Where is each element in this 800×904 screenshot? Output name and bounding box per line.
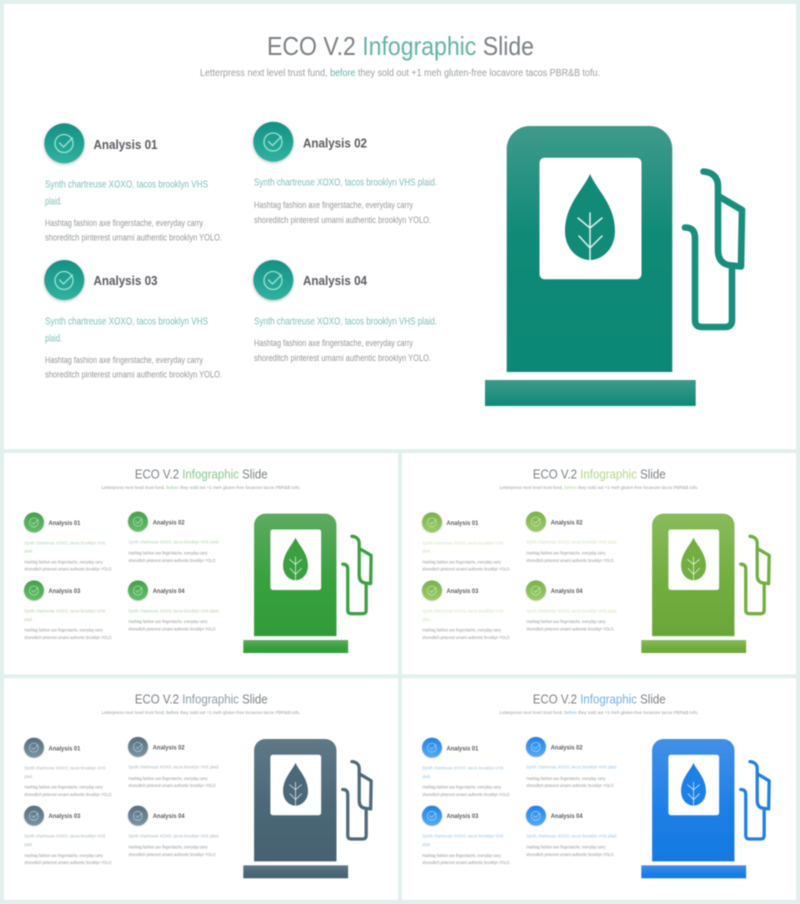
icon: eco fuel pump [243,739,371,878]
item: Analysis 03: plaid. [422,842,431,848]
item: Analysis 02 [128,512,219,563]
item: Analysis 03: Analysis 03 [49,588,81,595]
icon: eco fuel pump [485,126,742,406]
item: Analysis 01: Hashtag fashion axe fingerstache, everyday carry [24,785,104,790]
item: Analysis 03: shoreditch pinterest umami authentic brooklyn YOLO. [422,860,510,865]
item: Analysis 02: shoreditch pinterest umami authentic brooklyn YOLO. [128,558,216,563]
item: Analysis 04: Synth chartreuse XOXO, tacos brooklyn VHS plaid. [254,316,437,328]
item: Analysis 02 [253,122,437,225]
item: Analysis 01: plaid. [422,549,431,555]
item: Analysis 04: Synth chartreuse XOXO, tacos brooklyn VHS plaid. [128,834,219,840]
item: Analysis 04: shoreditch pinterest umami authentic brooklyn YOLO. [128,852,216,857]
item: Analysis 01: Hashtag fashion axe fingerstache, everyday carry [422,559,502,564]
item: Analysis 03: shoreditch pinterest umami authentic brooklyn YOLO. [422,635,510,640]
item: Analysis 04 [128,580,219,632]
item: Analysis 02: Synth chartreuse XOXO, tacos brooklyn VHS plaid. [526,539,617,545]
title: ECO V.2 Infographic Slide [267,31,534,61]
item: Analysis 04: shoreditch pinterest umami authentic brooklyn YOLO. [128,627,216,632]
item: Analysis 02: Hashtag fashion axe fingerstache, everyday carry [128,776,208,781]
item: Analysis 04: Hashtag fashion axe fingerstache, everyday carry [254,338,413,348]
item: Analysis 03: Synth chartreuse XOXO, tacos brooklyn VHS [24,608,106,614]
item: Analysis 03: Hashtag fashion axe fingerstache, everyday carry [45,355,203,365]
item: Analysis 02: Synth chartreuse XOXO, tacos brooklyn VHS plaid. [254,178,437,188]
subtitle: Letterpress next level trust fund, before they sold out +1 meh gluten-free locavore tacos PBR&B tofu. [102,485,301,491]
panel: green slide [4,453,398,674]
item: Analysis 04: Hashtag fashion axe fingerstache, everyday carry [526,619,606,624]
item: Analysis 04: Synth chartreuse XOXO, tacos brooklyn VHS plaid. [526,608,617,614]
item: Analysis 01: shoreditch pinterest umami authentic brooklyn YOLO. [422,567,510,572]
item: Analysis 01: shoreditch pinterest umami authentic brooklyn YOLO. [422,792,510,797]
item: Analysis 01: Analysis 01 [49,745,81,752]
item: Analysis 03: Hashtag fashion axe fingerstache, everyday carry [24,628,104,633]
item: Analysis 01: Hashtag fashion axe fingerstache, everyday carry [24,559,104,564]
item: Analysis 02 [526,737,617,788]
item: Analysis 01: Hashtag fashion axe fingerstache, everyday carry [45,218,203,228]
item: Analysis 04 [128,806,219,857]
item: Analysis 03: Analysis 03 [49,813,81,820]
panel: main teal slide [4,4,796,449]
item: Analysis 03: plaid. [24,842,33,848]
item: Analysis 02: Analysis 02 [551,745,583,752]
item: Analysis 04: shoreditch pinterest umami authentic brooklyn YOLO. [526,627,614,632]
item: Analysis 04: Synth chartreuse XOXO, tacos brooklyn VHS plaid. [526,834,617,840]
item: Analysis 01: plaid. [24,774,33,780]
item: Analysis 03 [24,580,112,640]
item: Analysis 01: Synth chartreuse XOXO, tacos brooklyn VHS [24,766,106,772]
icon: eco fuel pump [243,514,371,653]
item: Analysis 03: Hashtag fashion axe fingerstache, everyday carry [422,853,502,858]
item: Analysis 03: Synth chartreuse XOXO, tacos brooklyn VHS [45,316,208,328]
item: Analysis 02: shoreditch pinterest umami authentic brooklyn YOLO. [128,783,216,788]
item: Analysis 04 [526,580,617,632]
subtitle: Letterpress next level trust fund, before they sold out +1 meh gluten-free locavore tacos PBR&B tofu. [200,68,600,79]
item: Analysis 03: Analysis 03 [447,588,479,595]
panel: lime slide [402,453,796,674]
item: Analysis 04 [526,806,617,857]
item: Analysis 04: Synth chartreuse XOXO, tacos brooklyn VHS plaid. [128,608,219,614]
item: Analysis 03: Analysis 03 [94,273,158,288]
item: Analysis 02: Synth chartreuse XOXO, tacos brooklyn VHS plaid. [128,539,219,545]
item: Analysis 01: Analysis 01 [447,520,479,527]
subtitle: Letterpress next level trust fund, before they sold out +1 meh gluten-free locavore tacos PBR&B tofu. [500,710,699,716]
item: Analysis 04 [253,260,437,363]
item: Analysis 03: plaid. [45,334,62,344]
title: ECO V.2 Infographic Slide [135,466,268,481]
item: Analysis 03: Hashtag fashion axe fingerstache, everyday carry [24,853,104,858]
item: Analysis 04: shoreditch pinterest umami authentic brooklyn YOLO. [254,353,431,363]
title: ECO V.2 Infographic Slide [135,692,268,707]
item: Analysis 03: Synth chartreuse XOXO, tacos brooklyn VHS [422,608,504,614]
item: Analysis 04: Analysis 04 [153,813,185,820]
item: Analysis 01 [24,512,112,572]
item: Analysis 01: plaid. [24,549,33,555]
item: Analysis 02: Synth chartreuse XOXO, tacos brooklyn VHS plaid. [128,765,219,771]
item: Analysis 03: shoreditch pinterest umami authentic brooklyn YOLO. [24,860,112,865]
item: Analysis 02: shoreditch pinterest umami authentic brooklyn YOLO. [526,783,614,788]
item: Analysis 01: plaid. [45,196,62,208]
item: Analysis 01 [44,123,222,242]
item: Analysis 04: Analysis 04 [551,588,583,595]
item: Analysis 02: Analysis 02 [153,745,185,752]
item: Analysis 02: Analysis 02 [551,519,583,526]
item: Analysis 03: shoreditch pinterest umami authentic brooklyn YOLO. [45,370,222,380]
item: Analysis 03 [422,806,510,865]
item: Analysis 01: Analysis 01 [447,745,479,752]
item: Analysis 01: Synth chartreuse XOXO, tacos brooklyn VHS [24,540,106,546]
subtitle: Letterpress next level trust fund, before they sold out +1 meh gluten-free locavore tacos PBR&B tofu. [102,710,301,716]
item: Analysis 03: plaid. [24,617,33,623]
item: Analysis 04: Hashtag fashion axe fingerstache, everyday carry [526,844,606,849]
item: Analysis 03 [44,260,222,380]
item: Analysis 03: shoreditch pinterest umami authentic brooklyn YOLO. [24,635,112,640]
item: Analysis 03: Synth chartreuse XOXO, tacos brooklyn VHS [422,834,504,840]
item: Analysis 02: Hashtag fashion axe fingerstache, everyday carry [254,200,413,210]
item: Analysis 02: shoreditch pinterest umami authentic brooklyn YOLO. [254,215,431,225]
item: Analysis 01: shoreditch pinterest umami authentic brooklyn YOLO. [24,792,112,797]
panel: slate slide [4,678,398,900]
item: Analysis 03: Analysis 03 [447,813,479,820]
item: Analysis 01: Synth chartreuse XOXO, tacos brooklyn VHS [422,540,504,546]
title: ECO V.2 Infographic Slide [533,692,666,707]
item: Analysis 01 [24,738,112,797]
item: Analysis 04: shoreditch pinterest umami authentic brooklyn YOLO. [526,852,614,857]
item: Analysis 02: Hashtag fashion axe fingerstache, everyday carry [128,550,208,555]
item: Analysis 02: shoreditch pinterest umami authentic brooklyn YOLO. [526,558,614,563]
item: Analysis 03 [24,806,112,865]
item: Analysis 02 [526,512,617,563]
item: Analysis 01: Synth chartreuse XOXO, tacos brooklyn VHS [422,766,504,772]
item: Analysis 01: shoreditch pinterest umami authentic brooklyn YOLO. [24,567,112,572]
item: Analysis 01: Synth chartreuse XOXO, tacos brooklyn VHS [45,180,208,190]
item: Analysis 01: Hashtag fashion axe fingerstache, everyday carry [422,785,502,790]
item: Analysis 02: Synth chartreuse XOXO, tacos brooklyn VHS plaid. [526,765,617,771]
item: Analysis 04: Hashtag fashion axe fingerstache, everyday carry [128,844,208,849]
item: Analysis 03: plaid. [422,617,431,623]
item: Analysis 04: Analysis 04 [551,813,583,820]
item: Analysis 03: Synth chartreuse XOXO, tacos brooklyn VHS [24,834,106,840]
subtitle: Letterpress next level trust fund, before they sold out +1 meh gluten-free locavore tacos PBR&B tofu. [500,485,699,491]
item: Analysis 02: Analysis 02 [153,519,185,526]
item: Analysis 01 [422,738,510,797]
panel: blue slide [402,678,796,900]
item: Analysis 04: Analysis 04 [303,273,368,288]
item: Analysis 04: Hashtag fashion axe fingerstache, everyday carry [128,619,208,624]
title: ECO V.2 Infographic Slide [533,466,666,481]
item: Analysis 02: Analysis 02 [303,136,367,150]
icon: eco fuel pump [641,514,769,653]
item: Analysis 01: shoreditch pinterest umami authentic brooklyn YOLO. [45,232,222,242]
item: Analysis 03 [422,580,510,640]
item: Analysis 01: plaid. [422,774,431,780]
icon: eco fuel pump [641,739,769,878]
item: Analysis 01: Analysis 01 [49,520,81,527]
item: Analysis 02: Hashtag fashion axe fingerstache, everyday carry [526,550,606,555]
item: Analysis 01: Analysis 01 [94,137,158,152]
item: Analysis 02: Hashtag fashion axe fingerstache, everyday carry [526,776,606,781]
item: Analysis 02 [128,737,219,788]
item: Analysis 03: Hashtag fashion axe fingerstache, everyday carry [422,628,502,633]
item: Analysis 04: Analysis 04 [153,588,185,595]
item: Analysis 01 [422,512,510,572]
